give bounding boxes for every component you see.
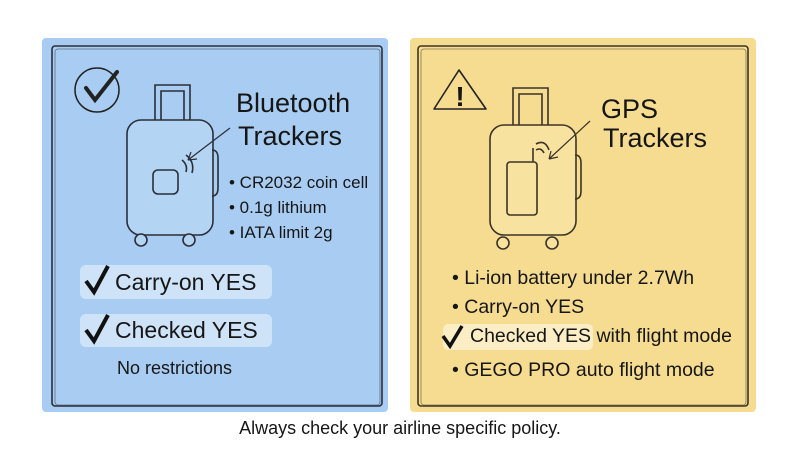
heading: Bluetooth Trackers bbox=[236, 88, 350, 151]
bullets: bluetooth specs: • IATA limit 2g bbox=[229, 223, 333, 242]
heading: GPS Trackers: Trackers bbox=[603, 123, 707, 153]
heading: Bluetooth Trackers: Trackers bbox=[238, 121, 342, 151]
panel: bluetooth bbox=[42, 38, 388, 412]
heading: Bluetooth Trackers: Bluetooth bbox=[236, 88, 350, 118]
icon: warning triangle: ! bbox=[455, 81, 465, 112]
callout: carry-on yes: Carry-on YES bbox=[115, 269, 256, 295]
bullets: gps rules bbox=[443, 267, 732, 381]
bullets: bluetooth specs: • 0.1g lithium bbox=[229, 198, 327, 217]
callout: carry-on yes bbox=[80, 265, 272, 299]
panel: gps bbox=[410, 38, 756, 412]
text: no restrictions: No restrictions bbox=[117, 358, 232, 378]
footer note: Always check your airline specific policy. bbox=[239, 418, 561, 438]
callout: checked yes: Checked YES bbox=[115, 317, 258, 343]
heading: GPS Trackers bbox=[601, 94, 707, 153]
icon: suitcase with bluetooth tag bbox=[127, 85, 230, 246]
bullets: gps rules: • Carry-on YES bbox=[452, 296, 584, 318]
icon: suitcase with gps tracker bbox=[490, 88, 590, 249]
bullets: gps rules: • GEGO PRO auto flight mode bbox=[452, 359, 715, 381]
icon: check circle bbox=[75, 68, 119, 112]
bullets: bluetooth specs bbox=[229, 173, 368, 242]
bullets: bluetooth specs: • CR2032 coin cell bbox=[229, 173, 368, 192]
bullets: gps rules: Checked YES with flight mode bbox=[470, 325, 732, 347]
heading: GPS Trackers: GPS bbox=[601, 94, 658, 124]
callout: checked yes bbox=[80, 314, 272, 347]
bullets: gps rules: • Li-ion battery under 2.7Wh bbox=[452, 267, 694, 289]
icon: warning triangle bbox=[434, 70, 486, 112]
